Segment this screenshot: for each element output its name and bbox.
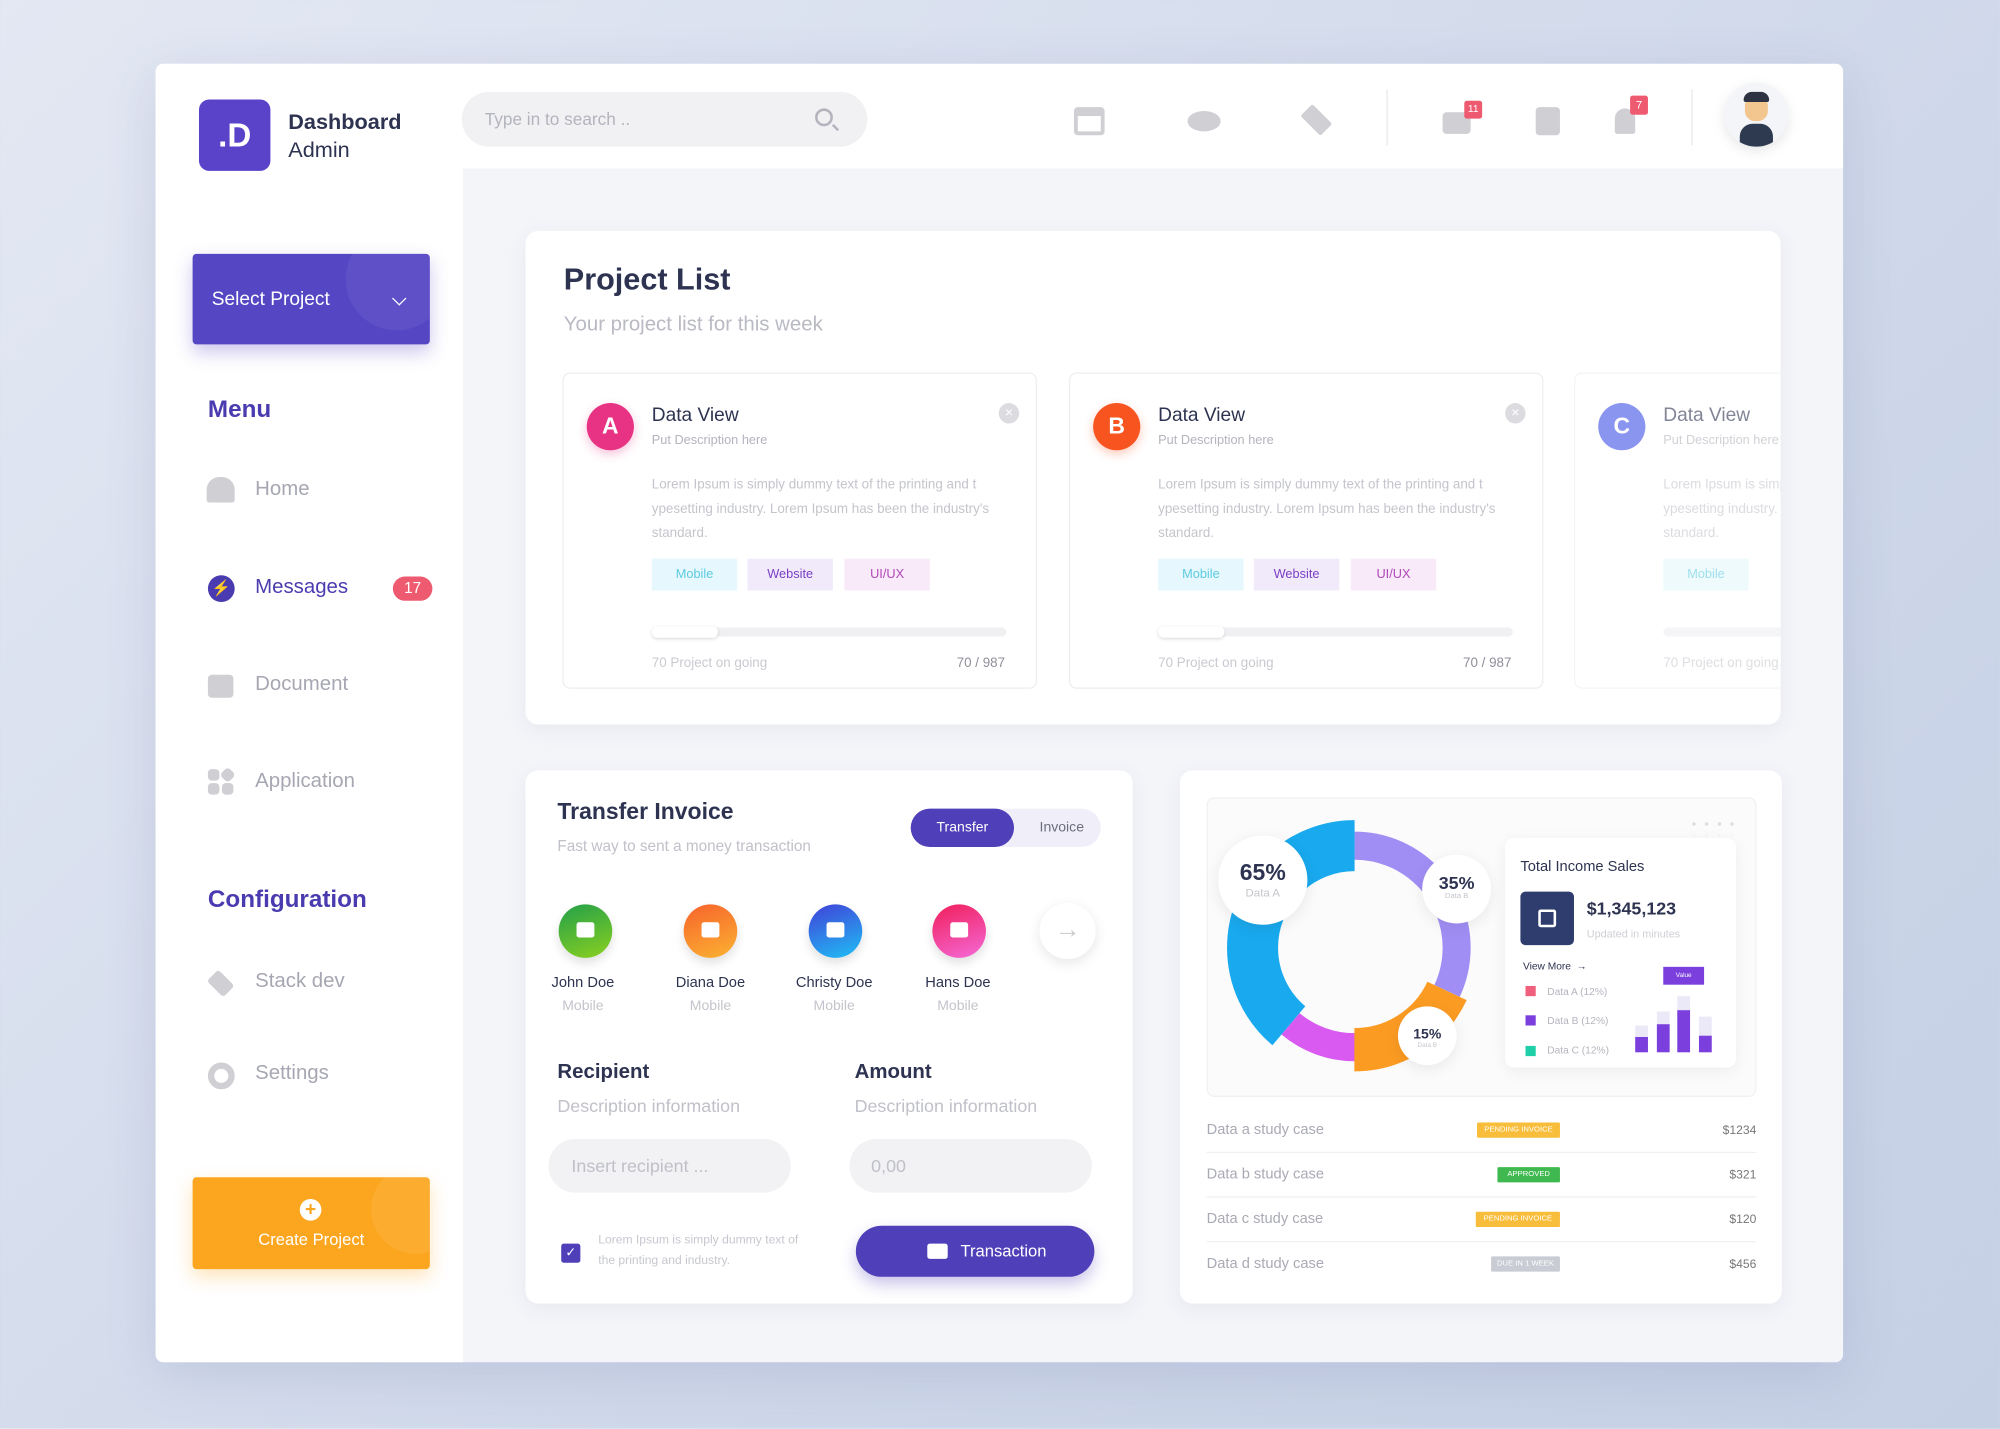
heading: Transfer Invoice (557, 798, 733, 824)
panel: transfer invoice (526, 770, 1133, 1304)
transaction button (856, 1226, 1094, 1277)
header icons: 7 (1636, 98, 1642, 111)
total income sales card: Data C (12%) (1547, 1045, 1609, 1056)
amount field: Description information (855, 1096, 1037, 1116)
project card C (clipped): Put Description here (1663, 434, 1779, 448)
menu items: Application (255, 770, 355, 792)
checkbox: Lorem Ipsum is simply dummy text of the printing and industry. (598, 1233, 798, 1268)
project card B: B (1108, 413, 1125, 439)
label 15%: Data B (1418, 1042, 1437, 1050)
panel: project list (526, 231, 1781, 724)
table rows: $321 (1729, 1168, 1756, 1182)
project card B: Mobile (1182, 568, 1220, 582)
menu items: Home (255, 478, 310, 500)
label 35% (1422, 855, 1491, 923)
menu items (206, 477, 432, 795)
project card B: Data View (1158, 404, 1245, 426)
toggle: Transfer (937, 820, 988, 835)
contacts: Mobile (814, 999, 855, 1014)
table rows (1206, 1122, 1756, 1272)
recipient field: Insert recipient ... (571, 1156, 708, 1176)
table rows: Data a study case (1207, 1122, 1324, 1138)
table rows: Data b study case (1207, 1167, 1324, 1182)
project card A: × (1005, 406, 1013, 421)
table rows: PENDING INVOICE (1484, 1126, 1553, 1134)
total income sales card: Data B (12%) (1547, 1015, 1608, 1027)
table rows: $1234 (1723, 1124, 1756, 1138)
project card C (clipped): Data View (1663, 404, 1750, 426)
configuration items: Settings (255, 1062, 329, 1084)
menu items: Messages (255, 577, 348, 598)
menu items: ⚡ (212, 579, 231, 597)
logo (198, 100, 402, 171)
configuration items (208, 970, 345, 1090)
menu items: Document (255, 673, 348, 695)
total income sales card (1505, 838, 1736, 1068)
total income sales card: Total Income Sales (1520, 860, 1644, 875)
project card A (562, 372, 1037, 689)
search bar (462, 92, 867, 147)
table rows: PENDING INVOICE (1484, 1216, 1552, 1223)
toggle: Invoice (1040, 820, 1084, 835)
total income sales card: $1,345,123 (1587, 898, 1676, 918)
label 65%: 65% (1240, 860, 1286, 885)
project card C (clipped): C (1614, 413, 1630, 439)
create project button (193, 1177, 430, 1269)
contacts (551, 904, 1098, 1014)
project card A: Data View (652, 404, 739, 426)
select project button: Select Project (212, 288, 330, 310)
project card A: Lorem Ipsum is simply dummy text of the printing and t ypesetting industry. Lorem Ipsum has been the industry's standard. (652, 477, 989, 541)
project card A: A (602, 413, 619, 439)
checkbox: ✓ (565, 1246, 576, 1260)
project card C (clipped): 70 Project on going (1663, 656, 1779, 671)
contacts: Mobile (690, 999, 731, 1014)
label 35%: 35% (1439, 872, 1475, 893)
label 65%: Data A (1246, 886, 1280, 899)
mini bar chart (1635, 966, 1712, 1052)
project card A: 70 Project on going (652, 656, 767, 671)
contacts: Diana Doe (676, 976, 745, 991)
amount field: Amount (855, 1061, 932, 1083)
configuration heading: Configuration (208, 886, 367, 913)
mini bar chart: Value (1676, 972, 1692, 980)
amount field (850, 1061, 1092, 1192)
project card B: Lorem Ipsum is simply dummy text of the printing and t ypesetting industry. Lorem Ipsum has been the industry's standard. (1158, 477, 1495, 541)
contacts: → (1055, 916, 1080, 944)
table rows: DUE IN 1 WEEK (1497, 1260, 1554, 1268)
label 15%: 15% (1413, 1027, 1441, 1042)
donut chart (1227, 820, 1471, 1072)
project card B: × (1511, 406, 1519, 421)
logo: Dashboard (288, 110, 402, 134)
project card C (clipped) (1574, 372, 1781, 689)
recipient field: Recipient (557, 1061, 649, 1083)
project card A: 70 / 987 (957, 656, 1005, 671)
project card B: Put Description here (1158, 434, 1274, 448)
label 35%: Data B (1445, 893, 1468, 901)
menu heading: Menu (208, 397, 271, 423)
label 15% (1398, 1006, 1457, 1065)
logo: .D (218, 116, 251, 154)
project card A: Website (767, 568, 813, 582)
project card C (clipped): Mobile (1687, 568, 1725, 582)
project card A: Mobile (676, 568, 713, 582)
table rows: $120 (1729, 1213, 1756, 1227)
project card A: UI/UX (870, 568, 904, 582)
logo: Admin (288, 138, 350, 162)
total income sales card: Updated in minutes (1587, 927, 1680, 940)
toggle (911, 809, 1101, 847)
create project button: + (305, 1199, 316, 1221)
recipient field: Description information (557, 1096, 740, 1116)
transaction button: Transaction (960, 1241, 1046, 1260)
select project button (193, 254, 430, 344)
configuration items: Stack dev (255, 971, 345, 992)
table rows: APPROVED (1507, 1171, 1550, 1179)
panel: income chart (1180, 770, 1782, 1304)
heading: Project List (564, 263, 730, 297)
label 65% (1218, 835, 1307, 925)
create project button: Create Project (258, 1230, 364, 1249)
contacts: Hans Doe (925, 976, 991, 991)
table rows: Data c study case (1207, 1212, 1323, 1227)
main window (156, 64, 1843, 1362)
header icons: 11 (1468, 103, 1479, 115)
recipient field (548, 1061, 790, 1192)
avatar (1724, 83, 1788, 147)
panel: transfer invoice: Fast way to sent a money transaction (557, 837, 811, 855)
contacts: John Doe (551, 976, 614, 991)
contacts: Mobile (937, 999, 979, 1014)
panel: project list: Your project list for this week (564, 314, 823, 335)
project card B: Website (1274, 568, 1319, 582)
total income sales card: Data A (12%) (1547, 986, 1607, 997)
project card A: Put Description here (652, 434, 767, 448)
header icons (1074, 89, 1692, 146)
search bar: Type in to search .. (485, 110, 630, 129)
project card B: 70 Project on going (1158, 656, 1274, 671)
dots decoration (1687, 818, 1739, 835)
menu items: 17 (404, 579, 421, 597)
table rows: Data d study case (1207, 1256, 1324, 1272)
table rows: $456 (1729, 1258, 1756, 1272)
total income sales card: View More → (1523, 960, 1587, 972)
contacts: Christy Doe (796, 976, 872, 991)
project card B: UI/UX (1376, 568, 1410, 582)
amount field: 0,00 (871, 1156, 906, 1176)
contacts: Mobile (562, 999, 604, 1014)
project card B: 70 / 987 (1463, 656, 1511, 671)
project card B (1069, 372, 1543, 689)
